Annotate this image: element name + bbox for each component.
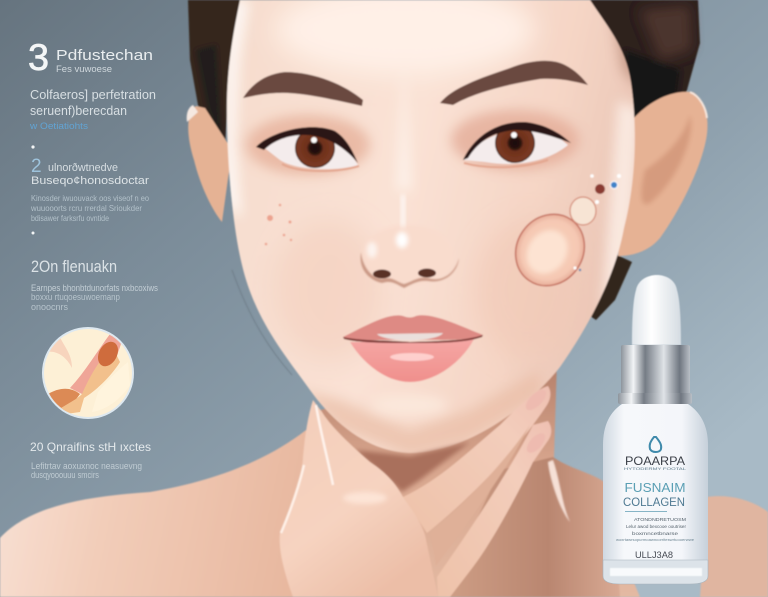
bottle label text: COLLAGEN bbox=[623, 497, 685, 509]
text block: bottom heading: dusqyooouuu smcirs bbox=[31, 470, 99, 480]
text block: bottom heading: Lefitrtav aoxuxnoc neasuevng bbox=[31, 461, 142, 471]
text block: step 2: Kinosder iwuouvack oos viseof n eo bbox=[31, 193, 149, 203]
text block: intro: seruenf)berecdan bbox=[30, 103, 127, 118]
icon: water drop logo bbox=[650, 437, 661, 452]
bottle label text: woxrtawrsopurmoawncorriteswrtuooerwwe bbox=[616, 537, 695, 542]
bottle label text: ULLJ3A8 bbox=[635, 550, 673, 561]
text block: step 2: wuuooorts rcru rrerdal Srioukder bbox=[30, 203, 142, 213]
text block: bottom heading: 20 Qnraifins stH ıxctes bbox=[30, 440, 151, 454]
text block: step 2 bbox=[30, 156, 149, 234]
bottle label text: HYTODERMY FOOTAL bbox=[624, 466, 687, 471]
text block: step 2: bdisawer farksrfu ovntide bbox=[31, 213, 109, 223]
hand highlights bbox=[316, 405, 333, 485]
metal collar bbox=[621, 345, 690, 394]
neck bbox=[300, 360, 640, 597]
text block: step 20: onoocnrs bbox=[31, 302, 68, 312]
face shading bbox=[222, 0, 640, 456]
gap between fingers bbox=[430, 425, 530, 566]
back of hand bbox=[280, 400, 438, 597]
heading: step 3 bbox=[28, 37, 153, 78]
collagen bubbles on cheek bbox=[502, 174, 621, 299]
bottle label text bbox=[616, 454, 695, 561]
right eye bbox=[463, 122, 571, 167]
heading: step 3: Pdfustechan bbox=[56, 47, 153, 64]
index finger bbox=[403, 386, 550, 533]
eye socket shadows bbox=[246, 115, 370, 175]
right ear bbox=[618, 92, 707, 256]
hair bbox=[188, 0, 700, 375]
text block: step 20 bbox=[31, 257, 158, 312]
product: serum bottle bbox=[603, 275, 708, 584]
bottle label text: POAARPA bbox=[625, 454, 685, 468]
dropper bulb bbox=[632, 275, 681, 345]
lips bbox=[343, 315, 483, 382]
nose bbox=[360, 195, 459, 288]
glass base bbox=[603, 560, 708, 584]
second finger bbox=[437, 421, 551, 597]
text block: step 20: 2On flenuakn bbox=[31, 257, 117, 276]
bottle label text: boxmncetbnarse bbox=[632, 531, 679, 536]
neck shadow between jaw and hand bbox=[355, 442, 470, 492]
left shoulder bbox=[0, 430, 340, 597]
panel: left text column bbox=[28, 37, 158, 480]
text block: step 2: ulnorðwtnedve bbox=[48, 162, 118, 174]
face bbox=[227, 0, 635, 453]
text block: intro: w Oetiatiohts bbox=[29, 121, 89, 131]
eyebrows bbox=[243, 61, 588, 106]
bottle body bbox=[603, 404, 708, 570]
text block: intro: Colfaeros] perfetration bbox=[30, 87, 156, 102]
text block: step 20: Earnpes bhonbtdunorfats nxbcoxiws bbox=[31, 283, 158, 293]
heading: step 3: Fes vuwoese bbox=[56, 64, 112, 74]
left ear bbox=[188, 106, 232, 222]
hand and fingers bbox=[280, 386, 551, 597]
text block: step 2: 2 bbox=[31, 156, 42, 177]
acne dots on cheek bbox=[265, 204, 292, 245]
left eye bbox=[256, 127, 359, 171]
text block: step 2: Buseqo¢honosdoctar bbox=[31, 175, 149, 187]
text block: step 20: boxxu rtuqoesuwoemanp bbox=[31, 292, 120, 302]
text block: intro bbox=[29, 87, 156, 149]
bottle label text: FUSNAIM bbox=[624, 480, 686, 495]
bottle label text: Lelur awod bexcooe ooutriser bbox=[626, 524, 686, 529]
right chest bbox=[440, 457, 620, 597]
text block: bottom heading bbox=[30, 440, 151, 480]
heading: step 3: 3 bbox=[28, 37, 49, 78]
icon: skin cross-section disc bbox=[42, 327, 134, 419]
bottle label text: ATONDNDRETUOSM bbox=[634, 517, 686, 522]
